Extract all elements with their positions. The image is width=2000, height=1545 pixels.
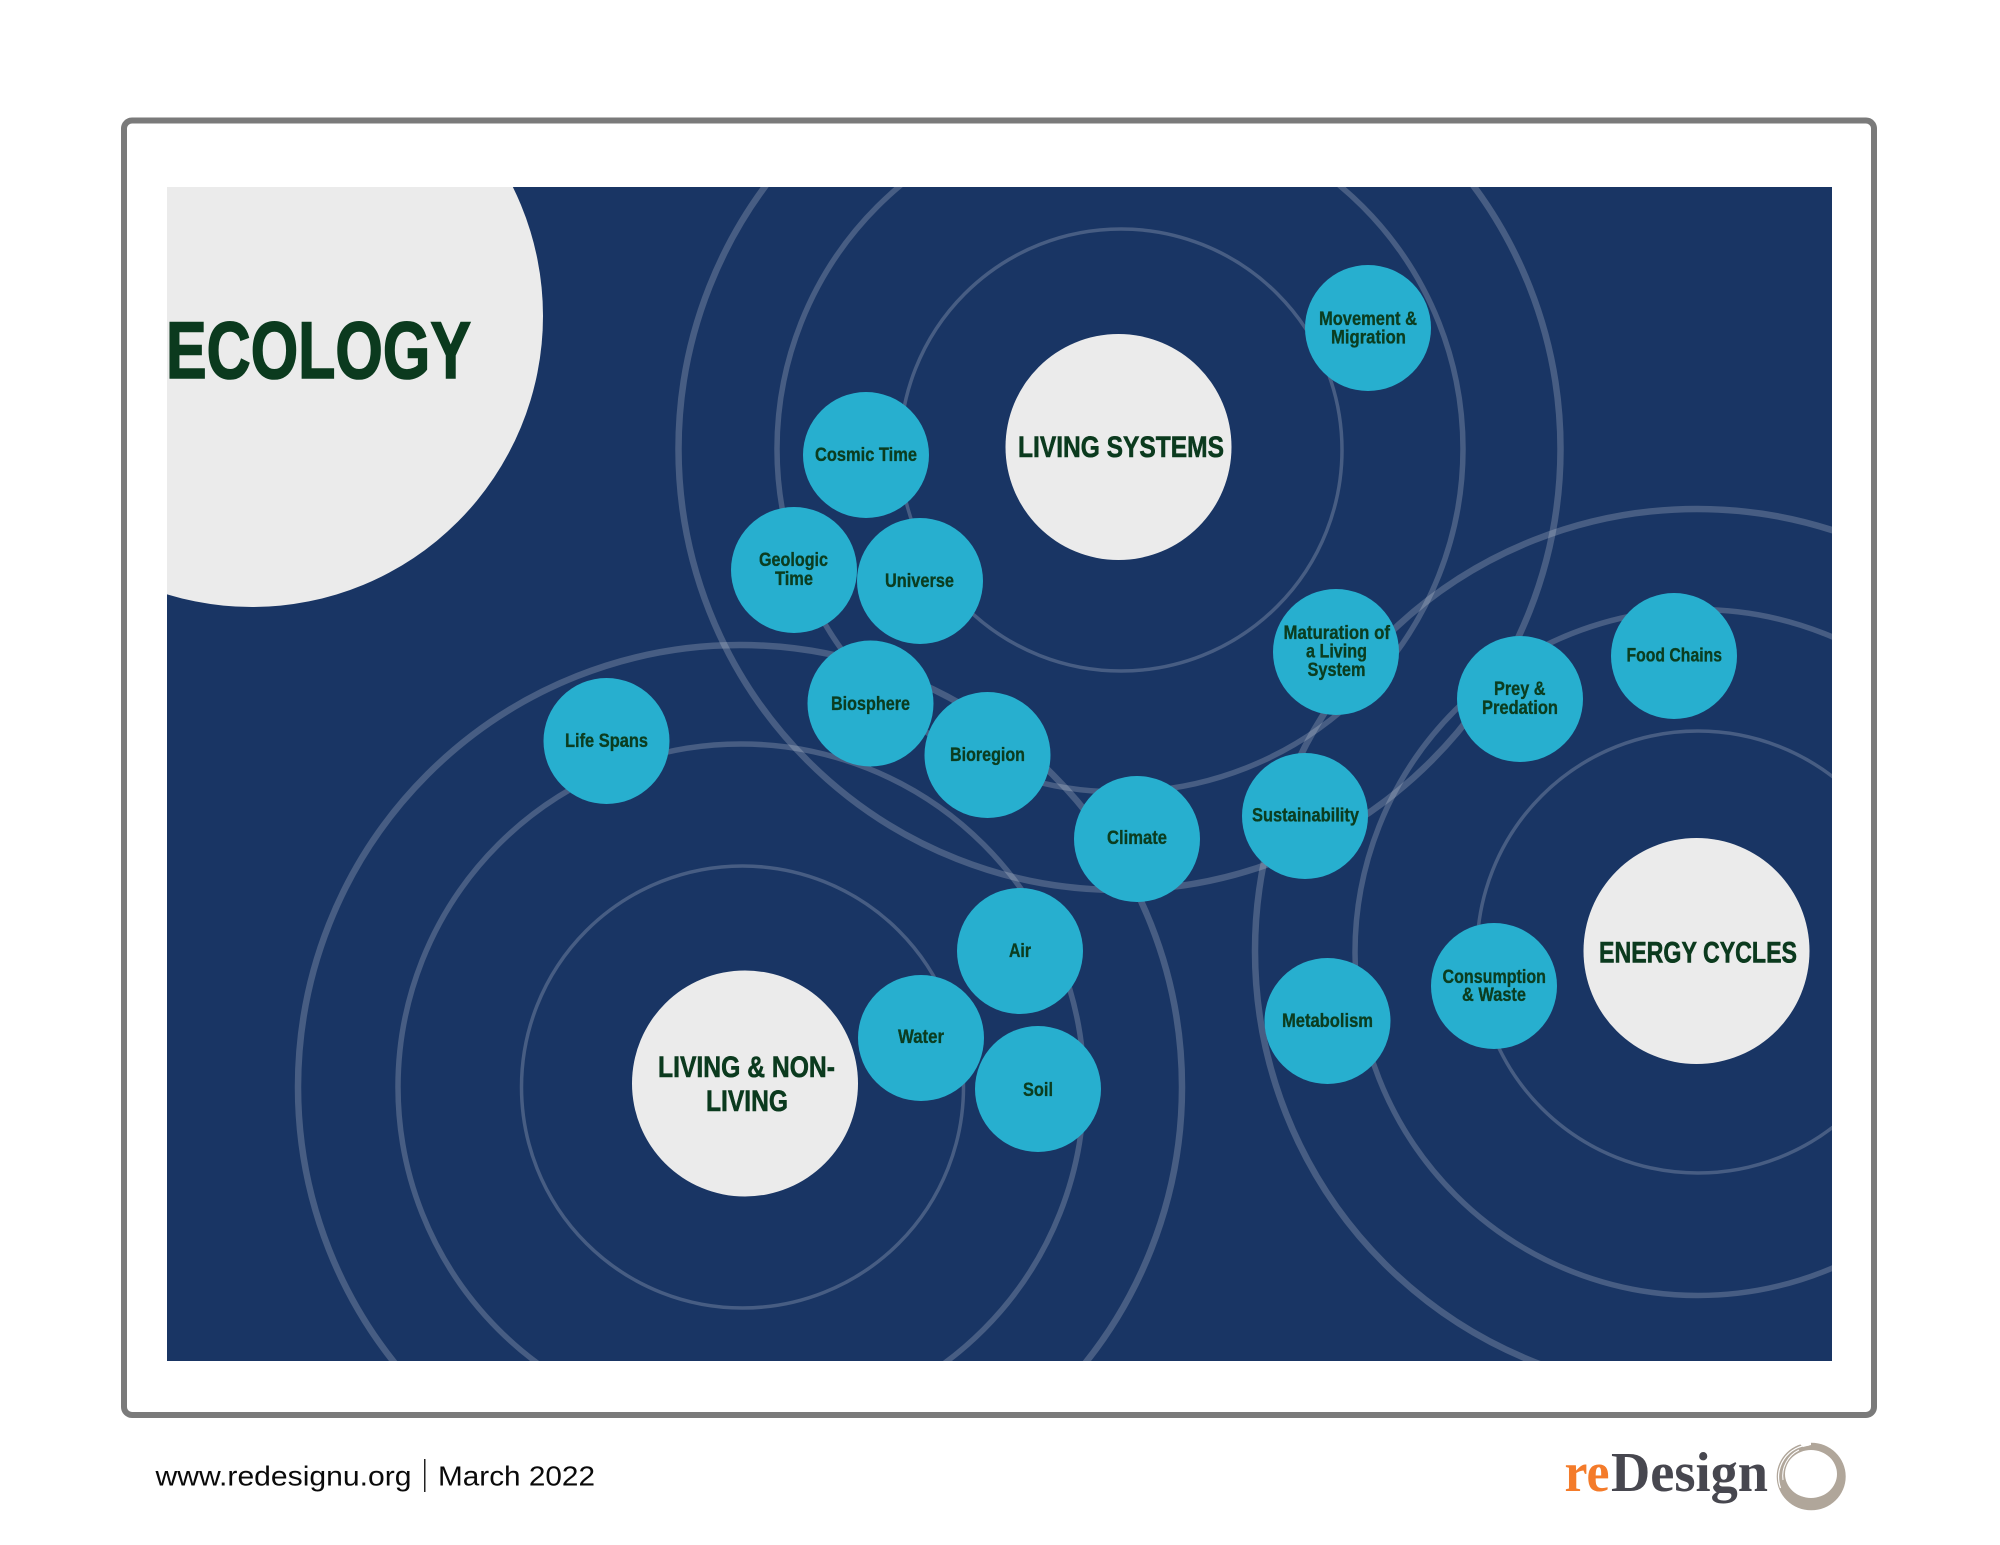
panel: ecology diagram: [167, 187, 1832, 1361]
node: universe: Universe: [885, 570, 954, 592]
hub: living systems: LIVING SYSTEMS: [1018, 431, 1224, 464]
logo: reDesign: re: [1564, 1442, 1610, 1504]
node: prey and predation: Predation: [1482, 697, 1558, 719]
node: sustainability: Sustainability: [1252, 804, 1359, 826]
hub: living and non-living: [632, 970, 858, 1196]
icon: brush circle: [1777, 1441, 1846, 1512]
node: maturation of a living system: [1273, 589, 1399, 715]
hub: energy cycles: ENERGY CYCLES: [1599, 936, 1797, 970]
node: geologic time: Time: [775, 568, 813, 590]
node: climate: [1074, 776, 1200, 902]
node: biosphere: Biosphere: [831, 693, 910, 715]
footer: website and date: www.redesignu.org: [154, 1460, 412, 1492]
hub: living and non-living: LIVING & NON-: [658, 1051, 835, 1084]
node: metabolism: [1264, 958, 1390, 1084]
node: prey and predation: Prey &: [1494, 678, 1546, 700]
node: soil: [975, 1026, 1101, 1152]
hub: living systems: [1006, 334, 1232, 560]
node: water: [858, 975, 984, 1101]
node: maturation of a living system: Maturation of: [1284, 622, 1390, 644]
node: bioregion: Bioregion: [950, 744, 1025, 766]
node: water: Water: [898, 1026, 944, 1048]
node: cosmic time: Cosmic Time: [815, 444, 917, 466]
node: air: [957, 888, 1083, 1014]
node: bioregion: [924, 692, 1050, 818]
node: maturation of a living system: a Living: [1306, 640, 1367, 662]
node: movement and migration: Migration: [1331, 326, 1406, 348]
node: climate: Climate: [1107, 827, 1167, 849]
footer: website and date: March 2022: [438, 1460, 595, 1492]
rings: living and non-living: [294, 642, 1186, 1361]
logo: reDesign: [1564, 1441, 1846, 1512]
node: food chains: [1611, 593, 1737, 719]
title: ecology: ECOLOGY: [166, 306, 471, 396]
node: biosphere: [808, 640, 934, 766]
rings: living systems: [675, 187, 1564, 893]
node: sustainability: [1242, 753, 1368, 879]
node: consumption and waste: [1431, 923, 1557, 1049]
node: life spans: [544, 678, 670, 804]
rings: energy cycles: [1252, 506, 1832, 1361]
footer: website and date: [154, 1459, 595, 1492]
node: soil: Soil: [1023, 1079, 1053, 1101]
node: life spans: Life Spans: [565, 730, 648, 752]
node: air: Air: [1009, 940, 1031, 962]
node: cosmic time: [803, 392, 929, 518]
node: prey and predation: [1457, 636, 1583, 762]
node: geologic time: Geologic: [759, 549, 828, 571]
logo: reDesign: Design: [1611, 1442, 1768, 1504]
node: metabolism: Metabolism: [1282, 1010, 1373, 1032]
hub: energy cycles: [1584, 838, 1810, 1064]
hub: living and non-living: LIVING: [706, 1085, 788, 1118]
node: consumption and waste: Consumption: [1442, 966, 1546, 988]
node: movement and migration: [1305, 265, 1431, 391]
frame: [124, 120, 1874, 1415]
node: food chains: Food Chains: [1626, 644, 1722, 666]
title: ecology: [167, 187, 543, 607]
node: consumption and waste: & Waste: [1462, 984, 1526, 1006]
node: universe: [857, 518, 983, 644]
node: maturation of a living system: System: [1308, 659, 1366, 681]
node: geologic time: [731, 507, 857, 633]
node: movement and migration: Movement &: [1319, 308, 1417, 330]
